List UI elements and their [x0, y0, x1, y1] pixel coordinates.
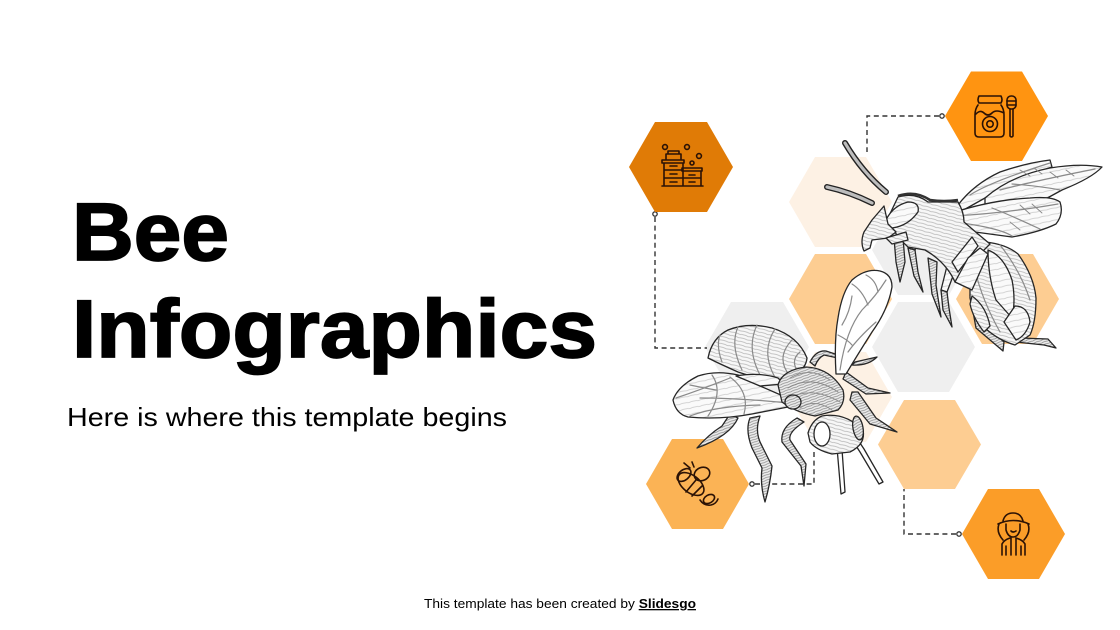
lower bee head: [808, 415, 865, 454]
subtitle: Here is where this template begins: [67, 402, 507, 432]
connector: honey: [867, 114, 944, 152]
hexagon: beekeeper: [962, 489, 1065, 579]
background honeycomb hexagons: [705, 157, 1059, 489]
upper bee antennae: [827, 143, 886, 203]
hexagon: honey jar: [945, 72, 1048, 161]
footer credit: This template has been created by Slidesgo: [424, 596, 696, 611]
lower bee thorax: [778, 367, 844, 416]
illustration: lower bee: [673, 270, 897, 502]
connector: beekeeper: [904, 489, 961, 536]
title: Bee: [72, 187, 229, 278]
upper bee wings: [949, 160, 1102, 237]
upper bee legs: [894, 222, 1056, 351]
icon: beehives: [662, 145, 703, 186]
icon: flying bee: [674, 462, 718, 505]
title: [72, 187, 597, 375]
icon: honey jar and dipper: [975, 96, 1016, 137]
hexagon: bee: [646, 439, 749, 529]
hexagon: beehives: [629, 122, 733, 212]
upper bee abdomen: [970, 242, 1036, 345]
lower bee legs and antennae: [697, 351, 897, 502]
lower bee abdomen: [708, 325, 807, 380]
connector: hive: [653, 212, 707, 348]
upper bee head: [862, 202, 918, 251]
connector: bee: [750, 450, 814, 486]
illustration: upper bee: [827, 143, 1102, 351]
icon: beekeeper: [998, 513, 1029, 555]
lower bee abdomen stripes: [718, 325, 800, 379]
upper bee thorax: [888, 194, 990, 290]
lower bee upright wing: [835, 270, 892, 374]
title: Infographics: [72, 284, 597, 375]
lower bee left wing: [673, 373, 790, 418]
